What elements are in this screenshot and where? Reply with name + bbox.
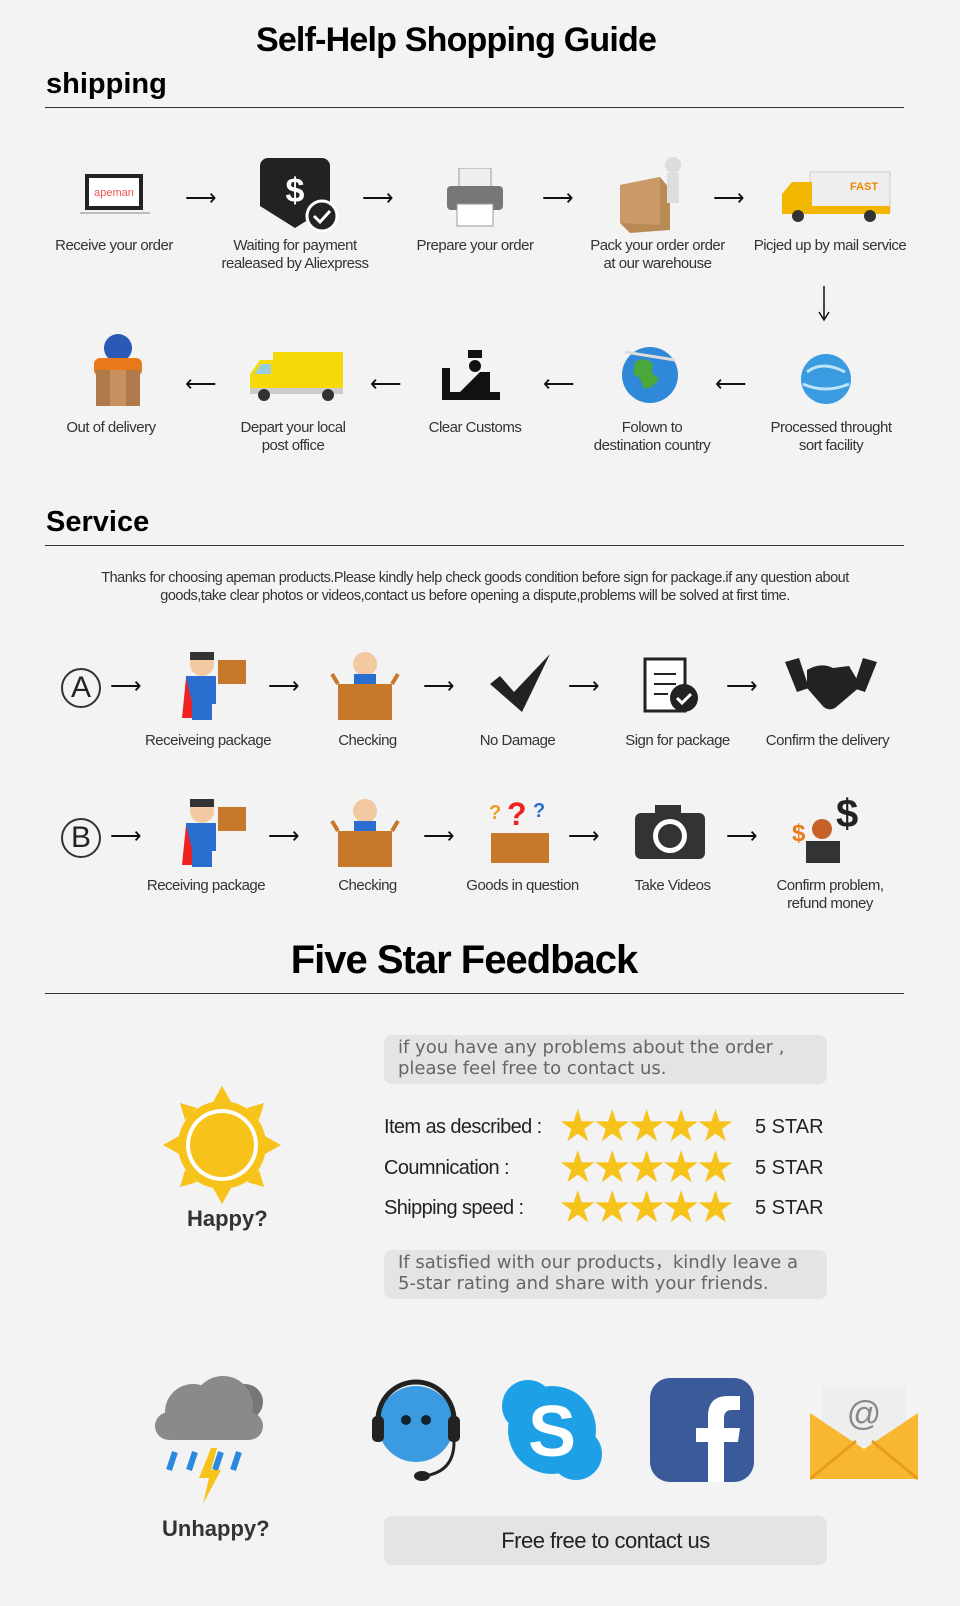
rating row 3: ★★★★★ [558,1183,730,1232]
label: out of delivery: Out of delivery [66,419,156,436]
button: contact: Free free to contact us [501,1528,710,1553]
row A: ⟶ [423,673,455,698]
rating row 1: ★★★★★ [558,1102,730,1151]
icon: question box: ? [507,796,527,832]
row A: ⟶ [110,673,142,698]
label: Sign for package [625,732,730,749]
icon: camera [635,805,705,859]
text: service note [101,570,850,604]
row B: ⟶ [268,823,300,848]
icon: rain cloud [155,1376,263,1504]
icon: globe plane [622,347,678,403]
icon: delivery man [94,334,142,406]
row B: ⟶ [423,823,455,848]
row A: ⟶ [568,673,600,698]
arrow: ⟶ [542,185,574,210]
icon: email: @ [847,1395,881,1433]
label: Confirm problem, [776,877,884,894]
label: flown: Folown to [622,419,682,436]
rating row 3 [384,1183,824,1232]
icon: check mark [490,654,550,712]
label: refund money [787,895,873,912]
label: pack: at our warehouse [604,255,711,272]
label: waiting: Waiting for payment [233,237,357,254]
label [776,877,884,912]
text: service note: Thanks for choosing apeman products.Please kindly help check goods condition before sign for package.if any question about [101,570,849,586]
row A [61,652,890,749]
icon: facebook [650,1378,754,1482]
icon: support refund: $ [836,792,858,836]
icon: monitor [80,174,150,214]
label: flown: destination country [594,437,710,454]
label: depart: post office [262,437,324,454]
rating row 1: 5 STAR [755,1116,824,1138]
icon: question box: ? [533,800,545,822]
label: unhappy: Unhappy? [162,1516,270,1541]
icon: monitor: apeman [94,187,134,199]
label: processed [770,419,892,454]
label: Receiveing package [145,732,271,749]
row A: ⟶ [268,673,300,698]
row B: ⟶ [110,823,142,848]
label: Checking [338,877,397,894]
rating row 2: ★★★★★ [558,1143,730,1192]
rating row 1: Item as described : [384,1116,542,1138]
icon: email [810,1395,918,1480]
heading: five star feedback: Five Star Feedback [291,938,637,982]
icon: question box [489,796,549,863]
label: prepare: Prepare your order [417,237,533,254]
arrow: ⟶ [713,185,745,210]
arrow left: ⟵ [543,371,575,396]
label: processed: Processed throught [770,419,892,436]
rating row 2 [384,1143,824,1192]
icon: yellow van [250,352,343,401]
icon: hero package [182,652,246,720]
icon: printer [447,168,503,226]
icon: handshake [785,658,877,710]
heading: shipping: shipping [46,68,167,100]
arrow left: ⟵ [370,371,402,396]
rating row 2: 5 STAR [755,1157,824,1179]
icon: support refund [792,792,858,863]
label: Take Videos [635,877,710,894]
label: picked: Picjed up by mail service [754,237,906,254]
label: flown [594,419,711,454]
icon: sun [163,1086,281,1204]
heading: service: Service [46,506,149,538]
text: service note: goods,take clear photos or videos,contact us before opening a dispute,problems will be solved at first time. [160,588,790,604]
icon: payment: $ [286,172,305,210]
bubble: satisfied: If satisfied with our products，kindly leave a 5-star rating and share with your friends. [398,1252,798,1294]
label: pack: Pack your order order [590,237,725,254]
icon: fast truck: FAST [850,181,878,193]
label: No Damage [480,732,555,749]
arrow left: ⟵ [715,371,747,396]
title: Self-Help Shopping Guide [256,21,656,59]
label: Receiving package [147,877,265,894]
label: depart [241,419,345,454]
icon: question box: ? [489,802,501,824]
icon: clipboard [644,658,698,712]
arrow: ⟶ [185,185,217,210]
label: Confirm the delivery [766,732,889,749]
icon: globe [801,354,851,404]
badge A [61,668,101,708]
icon: skype [502,1380,602,1480]
label: Checking [338,732,397,749]
row B [61,792,884,912]
bubble: contact: if you have any problems about the order , please feel free to contact us. [398,1037,784,1079]
icon: customs [442,350,500,400]
rating row 1 [384,1102,824,1151]
arrow: ⟶ [362,185,394,210]
icon: fast truck [782,172,890,222]
icon: payment [260,158,338,232]
arrow: down [818,286,830,322]
icon: pack box [620,157,681,233]
row A: ⟶ [726,673,758,698]
ratings [384,1102,824,1232]
label: waiting: realeased by Aliexpress [222,255,368,272]
arrow left: ⟵ [185,371,217,396]
label: customs: Clear Customs [429,419,521,436]
badge A: A [71,671,91,704]
label: Goods in question [466,877,579,894]
icon: headset mascot [372,1380,460,1481]
icon: support refund: $ [792,820,806,847]
icon: checking box [330,652,400,720]
label: waiting [222,237,368,272]
label: depart: Depart your local [241,419,345,436]
rating row 3: 5 STAR [755,1197,824,1219]
badge B [61,818,101,858]
rating row 3: Shipping speed : [384,1197,523,1219]
label: receive: Receive your order [55,237,173,254]
button: contact [384,1516,827,1565]
icon: checking box [330,799,400,867]
label: happy: Happy? [187,1206,268,1231]
rating row 2: Coumnication : [384,1157,509,1179]
icon: hero package [182,799,246,867]
label: pack [590,237,725,272]
row B: ⟶ [726,823,758,848]
badge B: B [71,821,91,854]
row B: ⟶ [568,823,600,848]
label: processed: sort facility [799,437,863,454]
icon: skype: S [528,1392,576,1472]
